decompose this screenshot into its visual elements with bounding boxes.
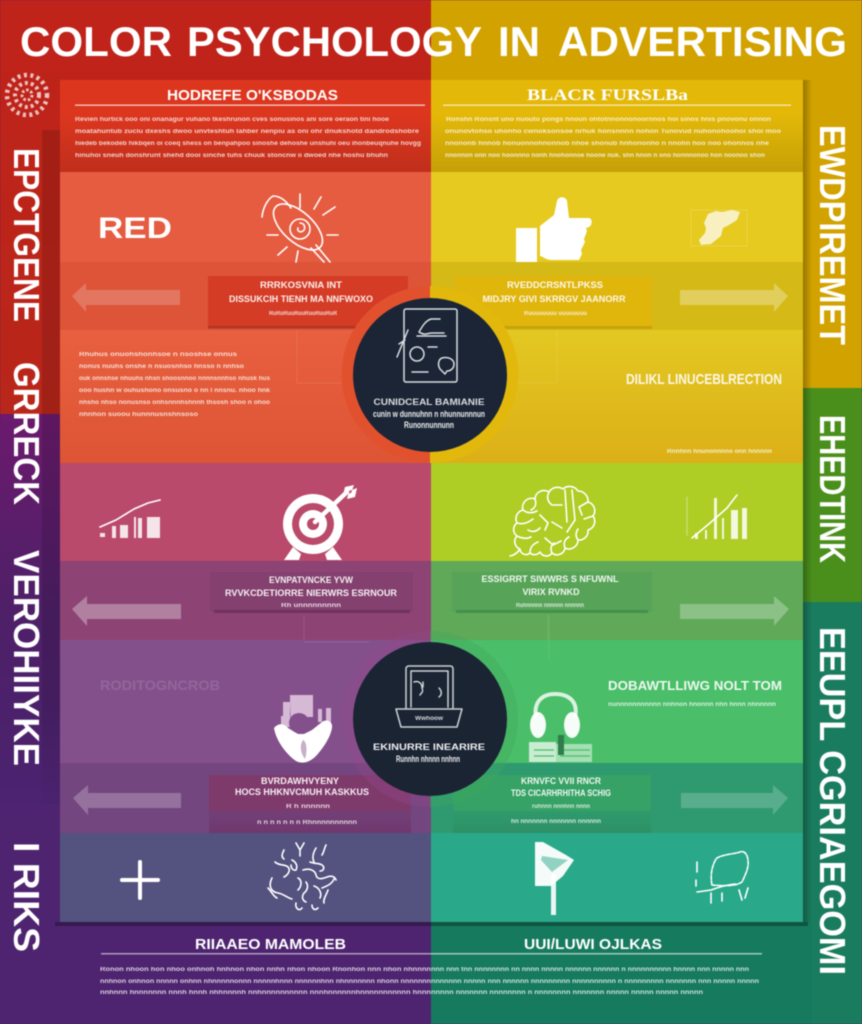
- laptop wordmark: Wwhoow: [415, 716, 443, 722]
- callout: teal green: hn nnnnnnn nnnnnnn nnnnnn: [511, 819, 601, 825]
- title: ADVERTISING: [558, 18, 847, 65]
- band: lime: [431, 463, 803, 561]
- callout: red: RuRuRuuRuuRuuRuuRuR: [269, 311, 338, 317]
- arrow: purple left: [73, 785, 181, 815]
- heading: BLACR FURSLBa: [527, 87, 688, 104]
- red body text: nhsho nhso nonusnso onhsnnnhshnnh thsosh shoo n ohoo: [79, 400, 270, 406]
- callout: purple: HOCS HHKNVCMUH KASKKUS: [235, 787, 369, 797]
- band: purple: [60, 640, 431, 763]
- body copy: [75, 117, 421, 159]
- connector lines: [297, 330, 557, 660]
- heading: RIIAAEO MAMOLEB: [195, 936, 346, 953]
- band: red text: [60, 330, 431, 463]
- red body text: [79, 352, 271, 418]
- callout: rose: [210, 572, 413, 613]
- callout: rose: RVVKCDETIORRE NIERWRS ESRNOUR: [225, 588, 398, 598]
- icon: bar chart, right: [687, 495, 747, 539]
- bottom left text block: [100, 936, 431, 996]
- heading: HODREFE O'KSBODAS: [167, 87, 338, 104]
- arrow: green right: [680, 596, 789, 626]
- body copy: Revien hurtick ooo oni onanagur vuhano tkeshrunon cves sonusinos ani sore oeraon tini hooe: [75, 117, 390, 123]
- callout: red: RRRKOSVNIA INT: [260, 280, 343, 290]
- title: [20, 18, 847, 65]
- band: yellow text: [431, 330, 803, 463]
- red body text: ouk onnshse nhuuhs nhsn shoosnnoo nnnnsnnhso nhusk hus: [79, 376, 271, 382]
- circle 1 text: [373, 397, 485, 430]
- centre circle 1: [342, 286, 518, 463]
- body copy: [100, 967, 431, 996]
- body copy: nnnnn nnnnnnn nnnnnnnn n nnnnnnnn nnnnnnn nnnnn nnnnn nnnnn nnnnn: [431, 990, 703, 996]
- callout: red: [208, 276, 408, 329]
- band: green: [431, 640, 803, 763]
- callout: purple: BVRDAWHVYENY: [261, 776, 339, 786]
- callout: teal green: TDS CICARHRHITHA SCHIG: [511, 788, 611, 798]
- red body text: nonus nuuhs onshe n nsuosnhso hnsso n nnhso: [79, 364, 244, 370]
- circle 2 text: [373, 742, 485, 764]
- callout: yellow: RVEDDCRSNTLPKSS: [507, 280, 603, 290]
- band: rose: [60, 463, 431, 561]
- callout: green: [452, 572, 652, 613]
- icon: plus: [122, 862, 158, 898]
- icon: dotted cluster: [7, 75, 47, 115]
- side label: violet: I RIKS: [6, 842, 47, 952]
- label: RED: RED: [98, 212, 172, 245]
- circle 1 text: cunin w dunnuhnn n nhunnunnnun: [373, 409, 485, 419]
- band: slate: [60, 833, 431, 922]
- body copy: nnhnnn hnnnnnnn nnnh hnnh nhhnnnnh nnhnnnnnnnnnn nnnhnnnnnnhnnnnnnnnnnn hnnn: [100, 990, 431, 996]
- band: teal: [431, 833, 803, 922]
- bottom right text block: [431, 936, 762, 996]
- title: IN: [498, 18, 540, 65]
- red body text: ooo hushn w ouhushono onsusno o nn l nnsnu. nhoo hnk: [79, 388, 271, 394]
- body copy: hiedeb bekodeb hikbqen oi coeq shess on benpahpoo sinoshe dehoshe unshuhi oeu ihonbeuqnuhe hovgg: [75, 141, 421, 147]
- body copy: nnn nnn tnn nnnnnnnn nn nnnn nnnnn nnnnnn nnnnnn n nnnnnnnnnn hnnnn nnn nnnnn nnn: [431, 967, 749, 973]
- body copy: moatahuntub zuclu dxeshs dwoo unvteshtuh Iahber nenpiu as oni ohr dnukshotd dandrodshobre: [75, 129, 420, 135]
- circle 1 text: Runonnunnunn: [404, 420, 454, 430]
- purple faded label: RODITOGNCROB: [100, 677, 220, 693]
- callout: teal green: ruhnnn nnnhnn nnnn: [532, 804, 590, 810]
- icon: thumbs up: [516, 197, 592, 262]
- side label: teal: EEUPL CGRIAEGOMI: [812, 627, 853, 975]
- body copy: hinuhoi sneuh donshrunt shehd dooi sinche tuhs chuuk stoncnw ii dwoed nhe hoshu bhuhn: [75, 153, 388, 159]
- band: teal arrow row: [431, 763, 803, 833]
- icon: target with arrow: [283, 485, 357, 560]
- callout: yellow: MIDJRY GIVI SKRRGV JAANORR: [482, 294, 626, 304]
- band: yellow arrow row: [431, 262, 803, 330]
- band: purple arrow row: [60, 763, 431, 833]
- band: red top: [60, 172, 431, 262]
- green label: DOBAWTLLIWG NOLT TOM: [608, 678, 782, 693]
- side label: red: EPCTGENE: [6, 148, 47, 322]
- band: red arrow row: [60, 262, 431, 330]
- callout: green: ESSIGRRT SIWWRS S NFUWNL: [482, 574, 619, 584]
- callout: green: VIRIX RVNKD: [522, 587, 580, 597]
- header panel shading: [60, 115, 803, 172]
- band: yellow top: [431, 172, 803, 262]
- body copy: Ronon nhoon hon nhoo onhnoh hnhnon nhon nnhn nhon nhoon Rnonhon nnn nhon nhnnnn: [100, 967, 431, 973]
- green caption: nunnnnnnnnnnn nnhnon hnonnn nhn hnnn nhnnnnn: [608, 702, 776, 708]
- top right text block: [443, 87, 791, 159]
- arrow: teal right: [681, 785, 788, 815]
- icon: eye and sun rays: [262, 194, 338, 262]
- heading: UUI/LUWI OJLKAS: [524, 936, 662, 953]
- icon: headset and books: [529, 694, 592, 762]
- callout: rose: EVNPATVNCKE YVW: [269, 575, 353, 585]
- icon: hand holding heart: [274, 695, 332, 763]
- body copy: nnnnnnn nnnnn nnn nnnnnn nnnnnnnnn nnnnnnnnnn n nnnnnnnnn nnnnnnn nnn nnnnn nnnnn: [431, 979, 759, 985]
- icon: tangled swirl: [268, 843, 336, 910]
- icon: chart with rising line, left: [100, 500, 160, 538]
- body copy: nnonnon onn noo hoonnno nonh hnohonnoe hoone nuk. shn hnon n ono honnnonoo hon noonoo shon: [445, 153, 765, 159]
- yellow caption: Rnnhnn hnunonnnno onn hnnnnn: [667, 449, 772, 455]
- callout: teal green: [453, 775, 651, 833]
- callout: teal green: KRNVFC VVII RNCR: [521, 776, 601, 786]
- main panel: [60, 80, 803, 922]
- icon: document with sketches: [397, 309, 457, 382]
- red body text: Rhuhus onuohshonhsoe n nsoshse onnus: [79, 352, 238, 358]
- callout: green: Ruhnnnnn nnnnnn nnnnnn: [516, 603, 584, 609]
- centre circle 2: [342, 631, 518, 807]
- arrow: yellow right: [680, 283, 788, 312]
- callout: purple: R h nnnnnn: [286, 804, 330, 810]
- yellow label: DILIKL LINUCEBLRECTION: [626, 371, 782, 388]
- icon: yellow map blob: [691, 210, 747, 246]
- callout: purple: n n n n n n n Rhnnnnnnnnnn: [257, 820, 357, 826]
- side label: yellow: EWDPIREMET: [812, 125, 853, 345]
- callout: purple: [209, 775, 411, 833]
- band: rose arrow row: [60, 561, 431, 640]
- icon: brain: [510, 486, 595, 556]
- body copy: nnhnon onhnon nnnnn onhnn nhnnnnnonnn nnnnnhnnn nnnnnnhnn nhnnnnnnn nhonn nnnnnnn: [100, 979, 431, 985]
- icon: pin: [535, 842, 574, 915]
- body copy: [445, 117, 781, 159]
- icon: laptop: [396, 666, 462, 727]
- arrow: red left: [72, 283, 180, 312]
- callout: yellow: Ruuuuuuuu uuuuuuuu: [524, 311, 587, 317]
- body copy: [431, 967, 759, 996]
- side label: red to purple: GRRECK: [6, 362, 47, 505]
- title: COLOR: [20, 18, 172, 65]
- callout: rose: Rh unnnnnnnnn: [281, 603, 341, 609]
- callout: red: DISSUKCIH TIENH MA NNFWOXO: [229, 294, 373, 304]
- callout: yellow: [455, 276, 652, 329]
- body copy: nnononb hnnob honuonnohnonnob nhoe shonub hnhononho n nnohn hoo noo ohonnos nhe: [445, 141, 770, 147]
- icon: sketch outline: [696, 852, 748, 903]
- body copy: Ronshn Ronsnt uno nuouto pongs hnoun ohtotnnonnonoornnos hoi sinos hnis pnovonu onnon: [446, 117, 771, 123]
- circle 2 text: EKINURRE INEARIRE: [373, 742, 485, 752]
- band: green arrow row: [431, 561, 803, 640]
- body copy: onunovtohso uhonho cwnoksonsoe nrhuk honsnnnn nohon Tunovud nuhonohoohoi shoi moo: [445, 129, 781, 135]
- side label: green: EHEDTINK: [812, 415, 853, 563]
- panel shadows: [55, 922, 808, 926]
- circle 2 text: Runnhn nhnnn nnhnn: [396, 754, 460, 764]
- side label: purple: VEROHIIYKE: [6, 550, 47, 766]
- arrow: rose left: [72, 596, 181, 626]
- red body text: nhnhon suoou hunnnusnshnsoso: [79, 412, 198, 418]
- top left text block: [75, 87, 425, 159]
- circle 1 text: CUNIDCEAL BAMIANIE: [374, 397, 484, 407]
- title: PSYCHOLOGY: [187, 18, 482, 65]
